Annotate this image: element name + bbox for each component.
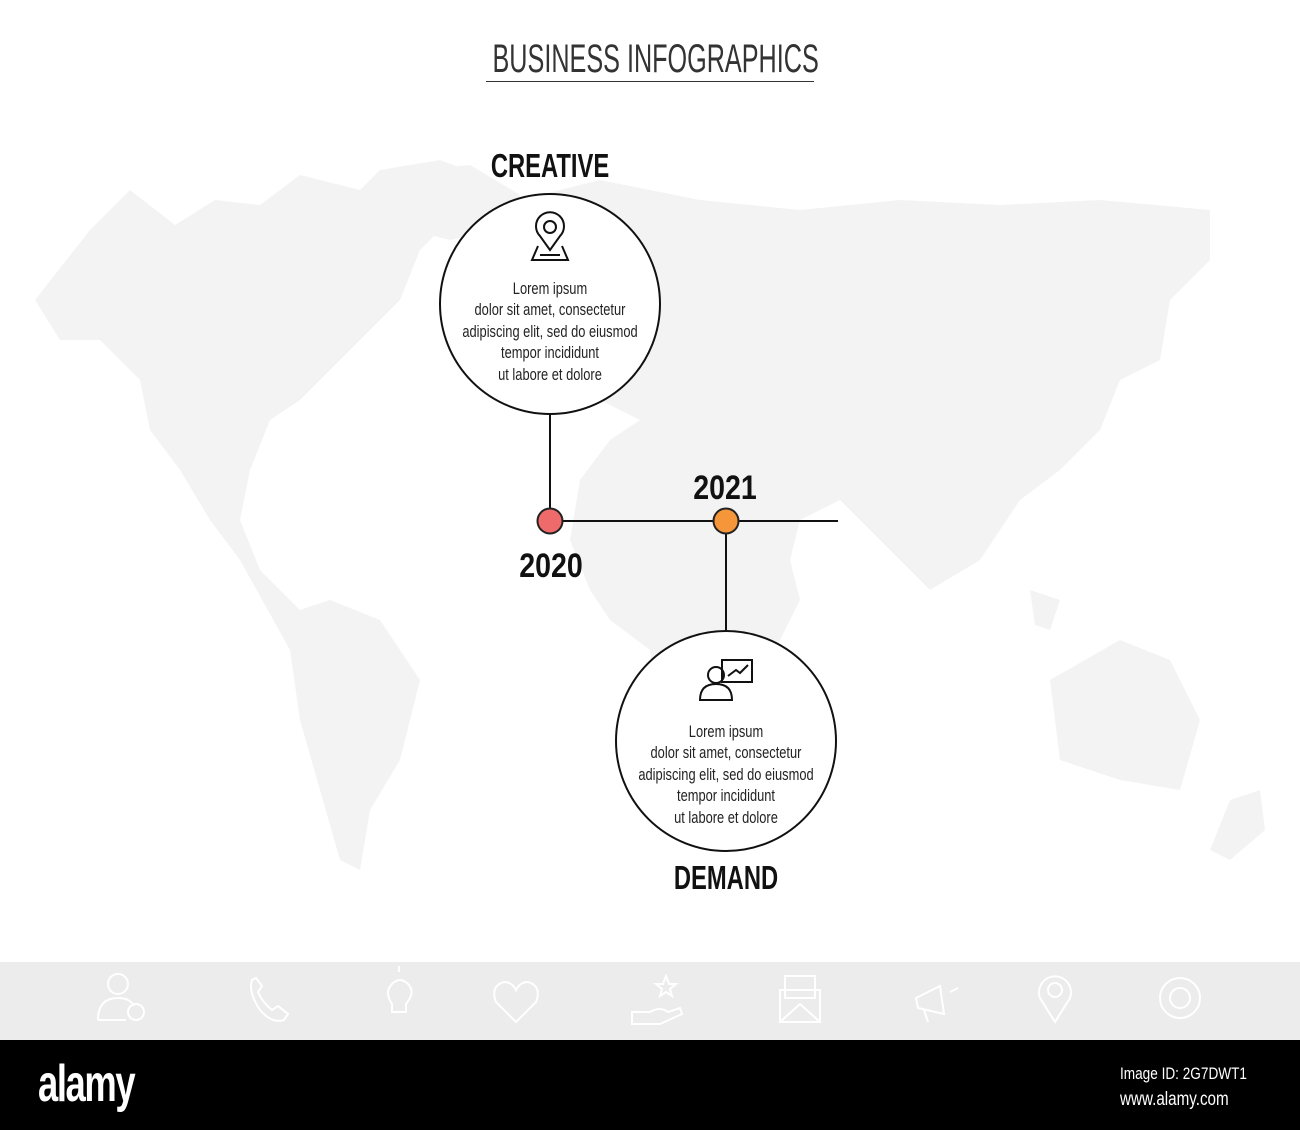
text block: creative: ut labore et dolore xyxy=(498,366,602,384)
footer bar: www.alamy.com xyxy=(1120,1089,1229,1110)
year 2021: 2021 xyxy=(693,469,757,507)
text block: creative: dolor sit amet, consectetur xyxy=(475,301,625,319)
year 2020: 2020 xyxy=(519,547,583,585)
icon: presenter xyxy=(700,660,752,700)
text block: creative: tempor incididunt xyxy=(501,344,599,362)
text block: demand: ut labore et dolore xyxy=(674,809,778,827)
heading: CREATIVE: CREATIVE xyxy=(491,147,609,184)
text block: creative xyxy=(462,280,638,384)
footer bar: alamy xyxy=(38,1055,134,1113)
text block: demand: dolor sit amet, consectetur xyxy=(651,744,801,762)
text block: creative: Lorem ipsum xyxy=(513,280,587,298)
text block: demand: adipiscing elit, sed do eiusmod xyxy=(638,766,814,784)
heading: DEMAND: DEMAND xyxy=(674,859,778,896)
bottom icon bar xyxy=(0,962,1300,1040)
text block: creative: adipiscing elit, sed do eiusmod xyxy=(462,323,638,341)
text block: demand: Lorem ipsum xyxy=(689,723,763,741)
title: BUSINESS INFOGRAPHICS xyxy=(492,37,819,81)
icon: map pin xyxy=(532,212,568,260)
text block: demand: tempor incididunt xyxy=(677,787,775,805)
footer bar xyxy=(0,1040,1300,1130)
text block: demand xyxy=(638,723,814,827)
footer bar: Image ID: 2G7DWT1 xyxy=(1120,1064,1247,1083)
